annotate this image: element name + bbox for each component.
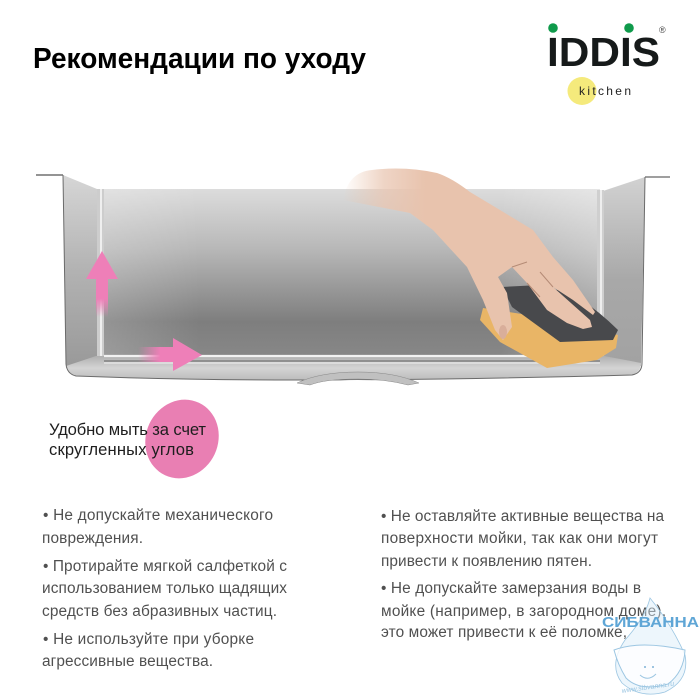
- watermark wordmark: СИБВАННА: [602, 615, 700, 631]
- fingers shadow: [512, 262, 553, 297]
- logo: IDDIS kitchen: [547, 23, 666, 105]
- tip: mechanical damage: • Не допускайте механического: [43, 507, 273, 524]
- right corner highlight: [597, 190, 604, 358]
- text column right: [381, 508, 666, 641]
- sponge dark scourer: [502, 285, 618, 342]
- registered mark: ®: [659, 25, 666, 35]
- tip: soft cloth: использованием только щадящих: [42, 580, 287, 597]
- sink left wall: [63, 175, 97, 368]
- sink floor: [66, 356, 641, 380]
- thumb nail: [499, 325, 507, 339]
- sink left flange: [36, 174, 63, 176]
- watermark bath: [614, 645, 685, 687]
- watermark face: [640, 674, 656, 678]
- logo green dot left: [548, 23, 558, 33]
- sink back wall: [100, 189, 600, 359]
- tip: aggressive substances: агрессивные вещества.: [42, 653, 213, 670]
- tip: mechanical damage: повреждения.: [42, 530, 143, 547]
- callout text: Удобно мыть за счет: [49, 420, 206, 439]
- callout: rounded corners: [49, 388, 232, 490]
- logo yellow spot: [568, 77, 596, 105]
- logo wordmark: IDDIS: [547, 29, 660, 75]
- tip: freezing: мойке (например, в загородном доме),: [381, 603, 666, 620]
- sink right wall: [603, 177, 645, 366]
- tip: freezing: • Не допускайте замерзания воды в: [381, 580, 641, 597]
- tip: active substances: поверхности мойки, так как они могут: [381, 530, 658, 547]
- logo green dot right: [624, 23, 634, 33]
- tip: soft cloth: • Протирайте мягкой салфеткой с: [43, 558, 287, 575]
- hand with sponge: [343, 169, 618, 368]
- text column left: [42, 507, 287, 670]
- left corner highlight: [97, 189, 104, 359]
- logo kitchen text: kitchen: [579, 84, 631, 98]
- watermark: Sibvanna: [602, 598, 700, 695]
- tip: active substances: • Не оставляйте активные вещества на: [381, 508, 664, 525]
- drain cut-out: [297, 372, 419, 385]
- pink blob: [132, 388, 232, 490]
- title: Рекомендации по уходу: [33, 43, 366, 75]
- sink illustration: [36, 175, 670, 389]
- arrow right: [138, 338, 202, 371]
- tip: freezing: это может привести к её поломке,: [381, 624, 627, 641]
- sink right flange: [645, 176, 670, 178]
- watermark url: www.sibvanna.ru: [621, 681, 675, 695]
- watermark drop: [616, 598, 686, 694]
- floor rail: [104, 355, 600, 357]
- tip: aggressive substances: • Не используйте при уборке: [43, 631, 254, 648]
- hand: [343, 169, 595, 340]
- sponge yellow body: [480, 308, 618, 368]
- arrow up: [86, 251, 118, 317]
- sink outline: [63, 175, 645, 380]
- callout text: скругленных углов: [49, 440, 194, 459]
- tip: active substances: привести к появлению пятен.: [381, 553, 592, 570]
- tip: soft cloth: средств без абразивных частиц.: [42, 603, 277, 620]
